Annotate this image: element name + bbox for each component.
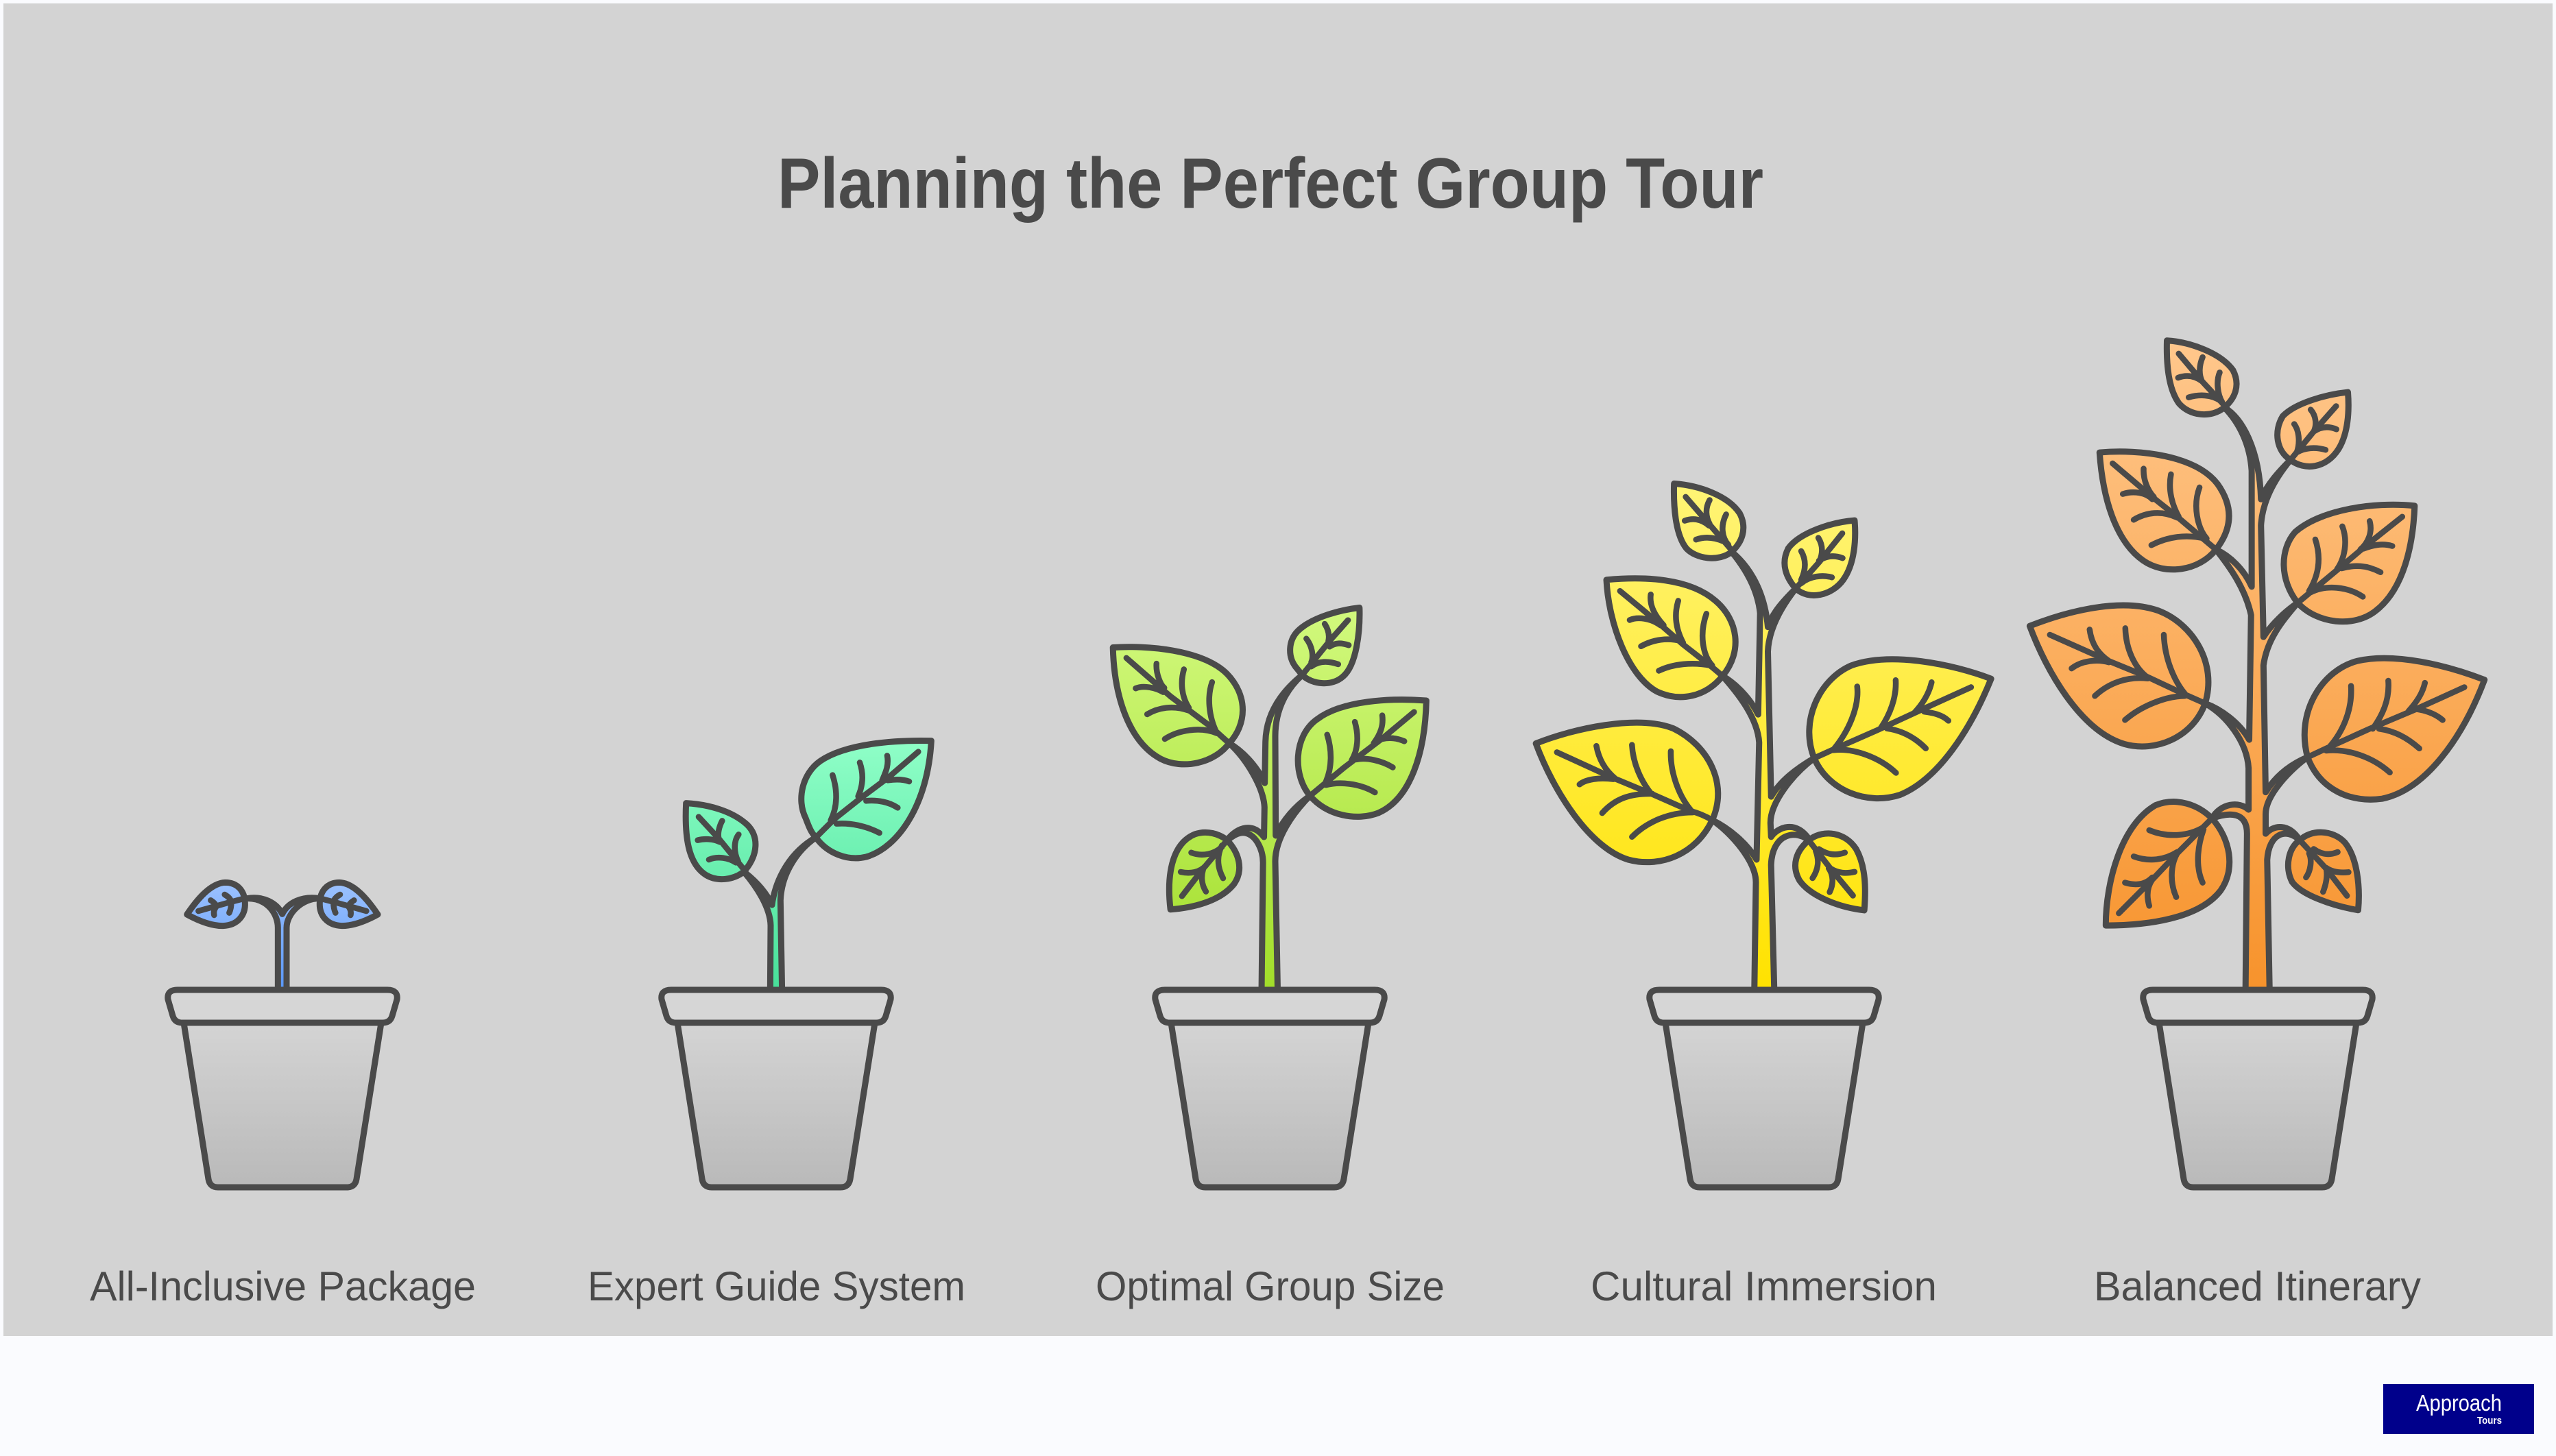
leaf: lower right: [2288, 832, 2359, 910]
leaf: large left: [1536, 723, 1718, 862]
step 5: Balanced Itinerary: [2029, 341, 2485, 1309]
logo: Approach Tours: Approach: [2416, 1390, 2502, 1416]
leaf: top left: [1674, 484, 1744, 558]
logo: Approach Tours: [2383, 1384, 2534, 1434]
leaf: top right: [1785, 520, 1855, 595]
stem: [1227, 675, 1310, 992]
plant: blue seedling: [187, 882, 378, 992]
stem: [2205, 407, 2308, 995]
label: Expert Guide System: [588, 1263, 965, 1309]
leaf: left: [187, 882, 245, 926]
stem: [247, 898, 320, 992]
leaf: large left: [1113, 647, 1242, 764]
pot rim: [662, 990, 891, 1023]
pot rim: [1650, 990, 1879, 1023]
leaf: lower left: [1169, 832, 1240, 910]
pot rim: [2143, 990, 2372, 1023]
pot body: [184, 1023, 381, 1187]
logo: Approach Tours: Tours: [2477, 1415, 2502, 1427]
leaf: large right: [2304, 658, 2485, 799]
plant: green sprout: [686, 740, 931, 992]
plant: lime plant: [1113, 607, 1426, 992]
label: All-Inclusive Package: [90, 1263, 476, 1309]
pot: [168, 990, 397, 1187]
pot: [1155, 990, 1384, 1187]
plant: orange plant: [2029, 341, 2485, 995]
step 3: Optimal Group Size: [1096, 607, 1445, 1309]
leaf: large right: [1298, 700, 1426, 816]
step 4: Cultural Immersion: [1536, 484, 1991, 1309]
plant: yellow plant: [1536, 484, 1991, 994]
leaf: large right: [801, 740, 931, 858]
step 1: All-Inclusive Package: [90, 882, 476, 1309]
stem: [744, 838, 816, 992]
leaf: top left: [2167, 341, 2236, 415]
pot: [1650, 990, 1879, 1187]
title: Planning the Perfect Group Tour: [777, 144, 1763, 223]
leaf: upper left: [1606, 579, 1735, 697]
pot rim: [168, 990, 397, 1023]
step 2: Expert Guide System: [588, 740, 965, 1309]
leaf: large right: [1809, 659, 1991, 799]
pot body: [2159, 1023, 2356, 1187]
label: Balanced Itinerary: [2094, 1263, 2421, 1309]
label: Cultural Immersion: [1591, 1263, 1937, 1309]
stem: [1712, 552, 1814, 994]
pot rim: [1155, 990, 1384, 1023]
leaf: upper right: [2284, 505, 2415, 622]
pot body: [1171, 1023, 1369, 1187]
pot body: [1665, 1023, 1863, 1187]
leaf: top right: [1290, 607, 1360, 683]
leaf: lower right: [1796, 834, 1865, 910]
leaf: large left: [2029, 605, 2208, 747]
leaf: lower left: [2106, 802, 2230, 925]
pot body: [677, 1023, 875, 1187]
leaf: small left: [686, 803, 756, 879]
leaf: upper left: [2099, 452, 2229, 570]
leaf: right: [320, 882, 378, 926]
pot: [2143, 990, 2372, 1187]
pot: [662, 990, 891, 1187]
leaf: top right: [2278, 392, 2348, 466]
label: Optimal Group Size: [1096, 1263, 1445, 1309]
